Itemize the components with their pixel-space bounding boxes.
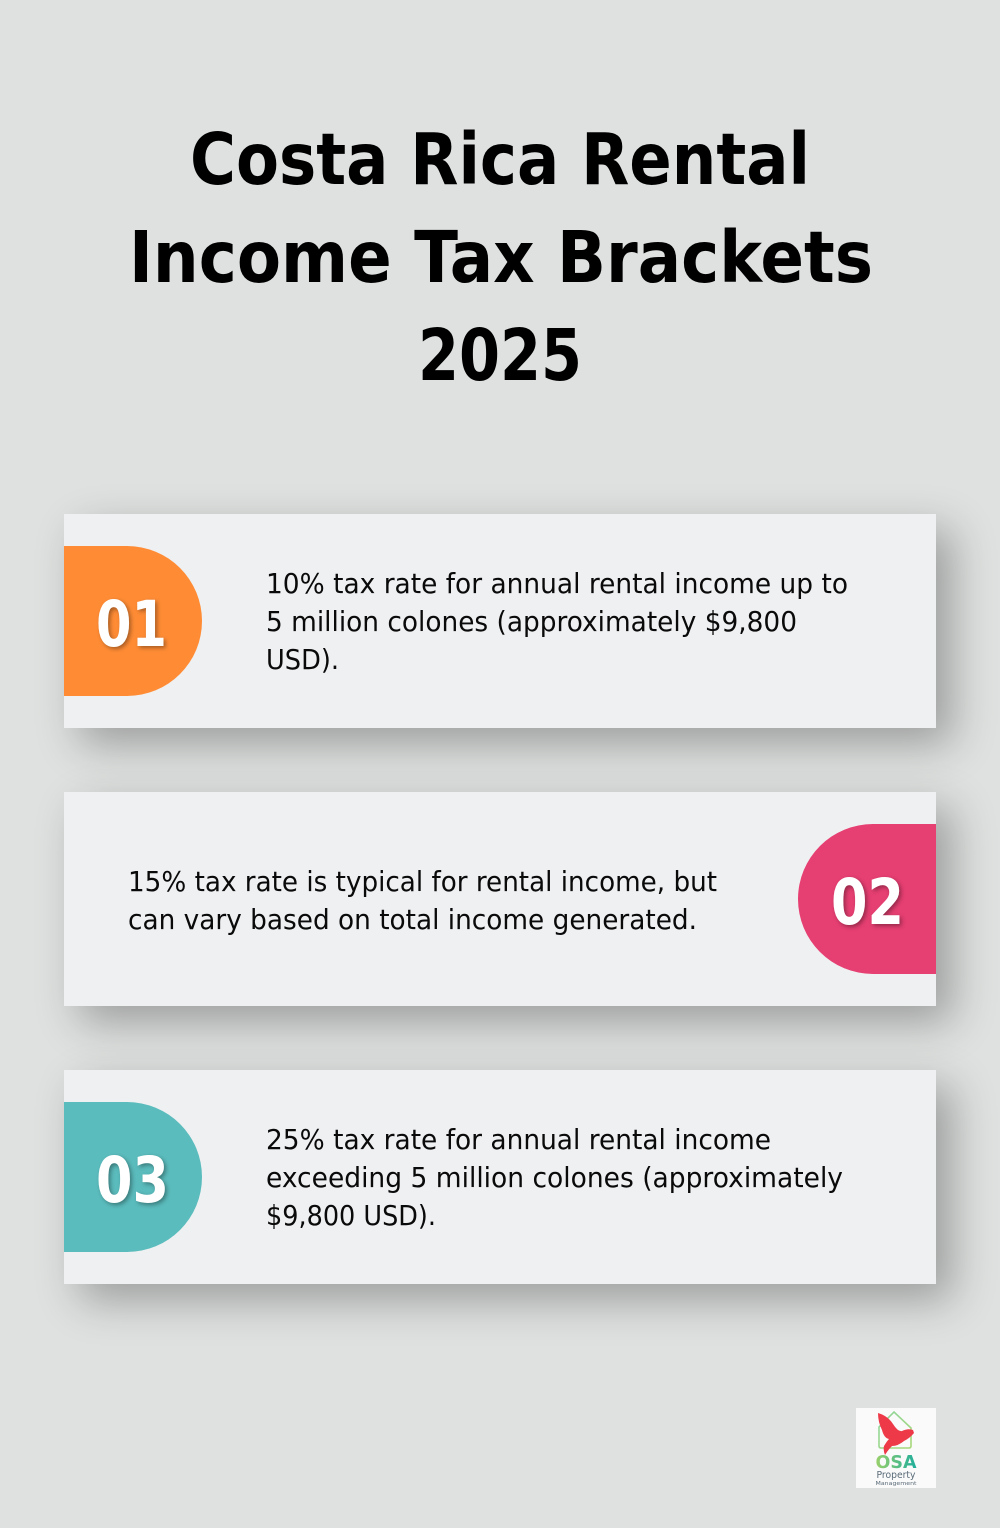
panel: 10% tax bracket — [64, 514, 936, 728]
badge: 01: 01 — [96, 588, 167, 661]
text: 15% tax rate — [128, 866, 717, 936]
logo: OSA Property Management: Property — [876, 1470, 916, 1481]
text: 15% tax rate: 15% tax rate is typical for rental income, but — [128, 866, 717, 898]
text: 10% tax rate: USD). — [266, 644, 339, 676]
text: 10% tax rate: 10% tax rate for annual rental income up to — [266, 568, 848, 600]
logo: OSA Property Management: OSA — [876, 1452, 917, 1473]
panel: 25% tax bracket — [64, 1070, 936, 1284]
text: 10% tax rate: 5 million colones (approximately $9,800 — [266, 606, 797, 638]
title: 2025 — [418, 314, 582, 397]
text: 15% tax rate: can vary based on total income generated. — [128, 904, 697, 936]
text: 10% tax rate — [266, 568, 848, 676]
badge: 03 — [64, 1102, 202, 1252]
text: 25% tax rate: $9,800 USD). — [266, 1200, 436, 1232]
text: 25% tax rate — [266, 1124, 843, 1232]
badge: 02 — [798, 824, 936, 974]
logo: OSA Property Management — [856, 1408, 936, 1488]
badge: 02: 02 — [831, 866, 904, 939]
text: 25% tax rate: 25% tax rate for annual rental income — [266, 1124, 771, 1156]
title: Income Tax Brackets — [129, 216, 873, 299]
title — [129, 118, 873, 397]
badge: 03: 03 — [96, 1144, 169, 1217]
text: 25% tax rate: exceeding 5 million colones (approximately — [266, 1162, 843, 1194]
title: Costa Rica Rental — [190, 118, 810, 201]
logo: OSA Property Management: Management — [876, 1481, 917, 1487]
badge: 01 — [64, 546, 202, 696]
panel: 15% tax bracket — [64, 792, 936, 1006]
